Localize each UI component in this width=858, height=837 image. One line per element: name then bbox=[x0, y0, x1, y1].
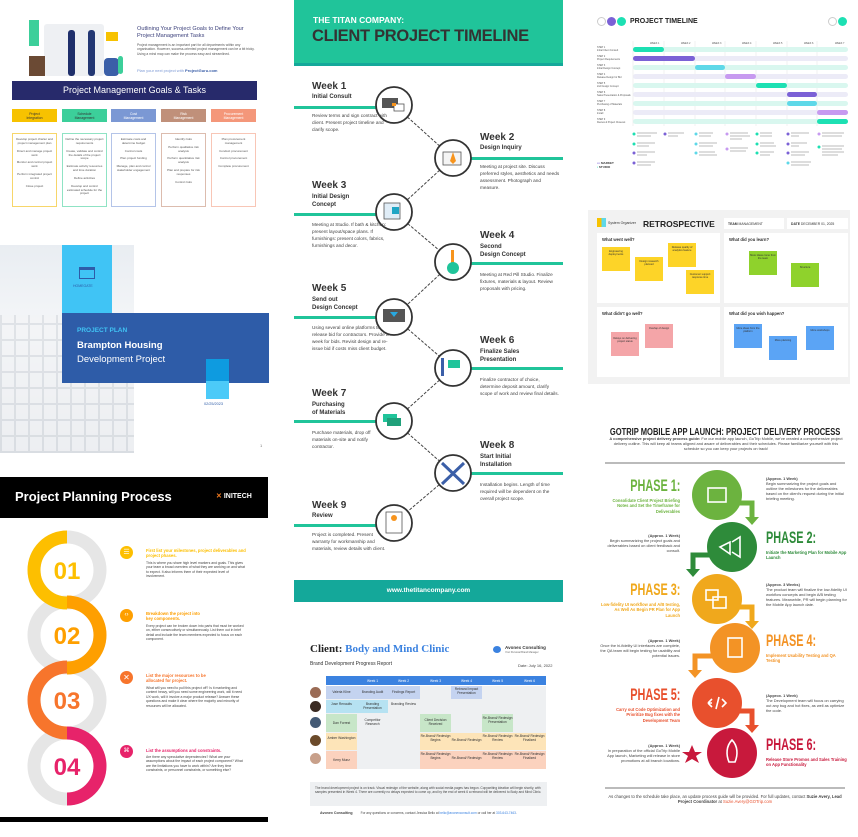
chart: gantt: Project Requirements bbox=[597, 58, 621, 61]
step 4: List the assumptions and constraints. bbox=[146, 748, 221, 753]
footer bbox=[294, 580, 563, 602]
step 1: This is where you share high level markers and goals. This gives your team a broad overview of what they are working on and what to expect. It also informs them of their expected level of involvement. bbox=[146, 561, 245, 578]
week 3: Meeting at Studio. If bath & kitchen: present layout/space plans. If furnishings: present colors, fabrics, furnishings and decor. bbox=[312, 222, 386, 248]
chart: gantt: STEP 8 bbox=[597, 109, 606, 112]
panel: gotrip delivery process: (Approx. 3 Weeks) bbox=[766, 582, 800, 587]
chart: gantt: STEP 6 bbox=[597, 91, 606, 94]
panel: gotrip delivery process: (Approx. 1 Week) bbox=[648, 638, 680, 643]
week 7 bbox=[312, 388, 371, 449]
chart: gantt: WEEK 2 bbox=[681, 42, 691, 45]
panel: gotrip delivery process: Begin summarizing the project goals and deliverables based on client feedback and consult. bbox=[608, 538, 680, 553]
table: Re-Brand/ Redesign Review bbox=[483, 752, 512, 760]
text: link: Plan your next project with ProjectGuru.com bbox=[137, 68, 217, 73]
table bbox=[326, 676, 546, 769]
logo: initech: ✕ INITECH bbox=[216, 493, 252, 500]
panel: client progress report bbox=[310, 643, 552, 815]
columns: Control procurement bbox=[220, 156, 247, 160]
logo: avonex bbox=[493, 645, 546, 654]
table: Dan Forrest bbox=[333, 721, 350, 725]
columns: Risk bbox=[180, 112, 187, 116]
chart: numbered rings bbox=[28, 530, 106, 806]
title box: Development Project bbox=[77, 354, 165, 365]
panel: project management goals bbox=[12, 20, 257, 207]
quadrant: wish bbox=[724, 307, 848, 377]
week 6: Presentation bbox=[480, 357, 516, 363]
phase 3: Low-fidelity UI workflow and A/B testing, As Well As Begin PR Plan for App Launch bbox=[601, 602, 680, 618]
week 5 bbox=[312, 283, 389, 351]
chart: gantt: Sales Presentation & Proposals bbox=[597, 94, 631, 97]
quadrant: wish: What did you wish happen? bbox=[729, 311, 784, 316]
chart: numbered rings: 04 bbox=[54, 754, 81, 781]
footer: www.thetitancompany.com bbox=[387, 587, 470, 594]
chart: gantt: STEP 1 bbox=[597, 46, 606, 49]
header: Project Planning Process bbox=[15, 489, 172, 504]
table: Re-Brand/ Redesign Finalized bbox=[515, 734, 544, 742]
quadrant: didn't go well: Overlap of design bbox=[649, 327, 669, 330]
columns: Project bbox=[29, 112, 40, 116]
columns: Direct and manage project work bbox=[17, 149, 52, 157]
week 7: Purchase materials, drop off materials on-site and notify contractor. bbox=[312, 430, 371, 449]
header bbox=[294, 0, 563, 66]
legend notes bbox=[632, 132, 844, 166]
quadrant: went well: Engineering deployments bbox=[609, 250, 623, 256]
chart: gantt: Release Design for Bid bbox=[597, 76, 622, 79]
columns: Schedule bbox=[77, 112, 92, 116]
columns: Estimate activity resources and time duration bbox=[67, 164, 102, 172]
week 6: Week 6 bbox=[480, 335, 514, 346]
phase 4: PHASE 4: bbox=[766, 631, 816, 650]
phase 1 bbox=[612, 476, 680, 514]
chart: icon circles and connectors bbox=[375, 86, 472, 542]
banner: Project Management Goals & Tasks bbox=[63, 85, 206, 95]
columns: Monitor and control project work bbox=[17, 160, 52, 168]
week 3 bbox=[312, 180, 386, 248]
logo: avonex: Your Personal Brand Manager bbox=[505, 651, 539, 654]
banner bbox=[12, 81, 257, 100]
logo: market studio bbox=[597, 161, 614, 169]
team box: TEAM MANAGEMENT bbox=[728, 222, 763, 226]
step 2: key components. bbox=[146, 616, 180, 621]
table: Amber Washington bbox=[328, 736, 355, 740]
step 4 bbox=[120, 745, 243, 772]
table: Re-Brand/ Redesign Begins bbox=[421, 752, 450, 760]
table: Re-Brand/ Redesign Review bbox=[483, 734, 512, 742]
title box: Brampton Housing bbox=[77, 340, 162, 351]
columns: Perform quantitative risk analysis bbox=[167, 156, 200, 164]
columns: Management bbox=[124, 116, 143, 120]
panel: gotrip delivery process: In preparation of the official GoTrip Mobile App launch, Marketing will release in store promotions at all branch locations. bbox=[607, 748, 680, 763]
week 8: Installation begins. Length of time required will be dependent on the overall project scope. bbox=[480, 482, 550, 501]
title box: PROJECT PLAN bbox=[77, 327, 127, 334]
phase 1: Consolidate Client Project Briefing Notes and Set the Timeframe for Deliverables bbox=[612, 498, 680, 514]
phase 1: PHASE 1: bbox=[630, 476, 680, 495]
step 3: allocated for project. bbox=[146, 678, 187, 683]
columns: Plan procurement management bbox=[222, 137, 245, 145]
week 5: Using several online platforms to release bid for contractors. Provide a week for bids. Revisit design and re-issue bid if costs miss client budget. bbox=[312, 325, 389, 351]
quadrant: went well: Design research planned bbox=[640, 260, 658, 266]
week 8: Installation bbox=[480, 462, 512, 468]
chart: gantt bbox=[597, 41, 848, 126]
chart: phase circles and arrows bbox=[682, 470, 760, 778]
chart: gantt: STEP 3 bbox=[597, 64, 606, 67]
chart: gantt: STEP 7 bbox=[597, 100, 606, 103]
columns: Procurement bbox=[224, 112, 243, 116]
table: Jose Renaults bbox=[331, 702, 352, 706]
week 8: Start Initial bbox=[480, 454, 511, 460]
table: Re-Brand/ Redesign bbox=[452, 756, 481, 760]
week 4: Design Concept bbox=[480, 252, 526, 258]
week 4: Meeting at Red Pill Studio. Finalize fixtures, materials & layout. Review proposals with pricing. bbox=[480, 272, 553, 291]
week 8: Week 8 bbox=[480, 440, 514, 451]
table: Rebrand Impact Presentation bbox=[455, 687, 478, 695]
columns: Perform integrated project control bbox=[17, 172, 52, 180]
intro: A comprehensive project delivery process guide: For our mobile app launch, GoTrip Mobile, we've created a comprehensive project delivery outline. This will keep all teams aligned and aware of deliverables and their schedules. Please familiarize yourself with this schedule so you can keep your projects on track! bbox=[609, 436, 843, 451]
table: Re-Brand/ Redesign Begins bbox=[421, 734, 450, 742]
quadrant: went well: Release quality of analytics feature bbox=[672, 246, 692, 252]
table: Re-Brand/ Redesign Finalized bbox=[515, 752, 544, 760]
chart: gantt: STEP 4 bbox=[597, 73, 606, 76]
phase 3: PHASE 3: bbox=[630, 580, 680, 599]
panel: gotrip delivery process: (Approx. 1 Week) bbox=[648, 533, 680, 538]
footer: Avonex Consulting For any questions or concerns, contact Jessica Bello at bello@avonexconsult.com or call her at 303-643-7463. bbox=[320, 811, 517, 815]
week 9: Review bbox=[312, 513, 333, 519]
panel: project planning process bbox=[0, 477, 268, 822]
panel: gotrip delivery process: Once the hi-fidelity UI interfaces are complete, the QA team will begin testing for usability and potential issues. bbox=[600, 643, 680, 658]
week 2: Meeting at project site. Discuss preferred styles, aesthetics and needs assessment. Photograph and measure. bbox=[480, 164, 559, 190]
week 3: Initial Design bbox=[312, 194, 349, 200]
week 1: Initial Consult bbox=[312, 94, 352, 100]
chart: gantt: STEP 5 bbox=[597, 82, 606, 85]
week 9: Project is completed. Present warranty for workmanship and materials, review details with client. bbox=[312, 532, 385, 551]
table: Branding Review bbox=[391, 702, 416, 706]
table: Branding Presentation bbox=[363, 702, 382, 710]
week 2: Week 2 bbox=[480, 132, 514, 143]
step 3: List the major resources to be bbox=[146, 673, 206, 678]
panel: gotrip delivery process bbox=[600, 426, 847, 804]
footer note: As changes to the schedule take place, an update process guide will be provided. For full updates, contact Suzie Avery, Lead Project Coordinator at Suzie.Avery@GOTrip.com bbox=[608, 794, 842, 804]
date: 02/25/2023 bbox=[204, 402, 223, 406]
chart: gantt: 2nd Design Concept bbox=[597, 85, 619, 88]
week 1: Review terms and sign contract with client. Present project timeline and clarify scope. bbox=[312, 113, 387, 132]
logo: avonex: Avonex Consulting bbox=[505, 645, 546, 650]
week 2: Design Inquiry bbox=[480, 145, 522, 151]
chart: numbered rings: 03 bbox=[54, 688, 80, 715]
quadrant: didn't go well: What didn't go well? bbox=[602, 311, 643, 316]
columns: Create, validate and control the details of the project scope bbox=[66, 149, 103, 160]
step 3: What will you need to pull this project off? Is it marketing and content heavy, will you need some engineering work, will it need UX work, will it involve a major product release? Answer these questions and make it clear where the majority and minority of resources will be allocated. bbox=[146, 686, 242, 708]
columns: Control costs bbox=[125, 149, 142, 153]
week 8 bbox=[480, 440, 550, 501]
chart: gantt: WEEK 1 bbox=[650, 42, 660, 45]
header: THE TITAN COMPANY: bbox=[313, 15, 404, 25]
step 2 bbox=[120, 609, 244, 641]
panel: project timeline gantt bbox=[597, 17, 848, 169]
week 3: Concept bbox=[312, 202, 336, 208]
columns: Estimate costs and determine budget bbox=[121, 137, 146, 145]
chart: numbered rings: 02 bbox=[54, 623, 80, 650]
step 3: ✕ bbox=[123, 673, 130, 682]
quadrant: wish: More ideas from the platform bbox=[736, 327, 760, 333]
step 1 bbox=[120, 546, 246, 578]
text: intro: Project management is an important part for all departments within any organisation. However, success-oriented project management can be a bit tricky. Using a mind map can make the process easy and streamlined. bbox=[137, 43, 255, 56]
panel: retrospective: System Organizer bbox=[608, 221, 636, 225]
background building image bbox=[0, 245, 134, 453]
phase 6: Release Store Promos and Sales Training on App Functionality bbox=[766, 757, 847, 767]
columns: Develop project charter and project management plan bbox=[16, 137, 53, 145]
week 5: Send out bbox=[312, 297, 338, 303]
chart: gantt: WEEK 5 bbox=[773, 42, 783, 45]
quadrant: went well bbox=[597, 233, 720, 303]
columns: Integration bbox=[26, 116, 43, 120]
table: Branding Audit bbox=[362, 690, 383, 694]
table: Week 2 bbox=[398, 678, 409, 682]
week 2 bbox=[480, 132, 559, 190]
week 6: Finalize contractor of choice, determine deposit amount, clarify scope of work and review final details. bbox=[480, 377, 559, 396]
panel: gotrip delivery process: The product team will finalize the low-fidelity UI workflow concepts and begin A/B testing features. Meanwhile, PR will begin planning for the Mobile App launch date. bbox=[766, 587, 847, 607]
title: RETROSPECTIVE bbox=[643, 219, 715, 229]
chart: gantt: Purchasing of Materials bbox=[597, 103, 623, 106]
phase 6: PHASE 6: bbox=[766, 735, 816, 754]
step 4: Are there any speculative dependencies? What are your assumptions about the impact of each project component? What are the limitations you have to work within? Are they time constraints, or personnel constraints, or something else? bbox=[146, 755, 243, 772]
header bbox=[0, 477, 268, 518]
step 2: ‹› bbox=[124, 612, 128, 618]
step 2: Every project can be broken down into parts that must be worked on, either consecutively or simultaneously. List them out in brief detail and include the team members expected to focus on each component. bbox=[146, 624, 244, 641]
heading: outlining goals: Outlining Your Project Goals to Define Your Project Management Tasks bbox=[137, 26, 244, 39]
columns: Close project bbox=[26, 184, 43, 188]
table: Competitor Research bbox=[364, 718, 381, 726]
chart: gantt: WEEK 6 bbox=[804, 42, 814, 45]
phase 5 bbox=[600, 687, 680, 723]
columns: Develop and control estimated schedule for the project bbox=[67, 184, 102, 195]
subtitle: Brand Development Progress Report bbox=[310, 661, 392, 667]
date: Date: July 16, 2022 bbox=[518, 663, 552, 668]
date box bbox=[787, 218, 848, 229]
week 1: Week 1 bbox=[312, 81, 346, 92]
week 9: Week 9 bbox=[312, 500, 346, 511]
table: Valeria Kline bbox=[332, 690, 351, 694]
panel: gotrip delivery process: (Approx. 1 Week) bbox=[766, 476, 798, 481]
table: Week 3 bbox=[430, 678, 441, 682]
note box bbox=[310, 782, 547, 806]
quadrant: didn't go well: Delays on delivering project status bbox=[613, 337, 637, 343]
step 4: ⌘ bbox=[124, 748, 130, 754]
panel: gotrip delivery process: The Development team will focus on carrying out any bug and hot fixes, as well as optimize the code. bbox=[766, 698, 844, 713]
panel: project plan cover bbox=[0, 245, 269, 453]
panel: gotrip delivery process: (Approx. 1 Week) bbox=[766, 693, 798, 698]
columns: Conduct procurement bbox=[219, 149, 248, 153]
table: Kerry Munz bbox=[333, 758, 350, 762]
week 6: Finalize Sales bbox=[480, 349, 519, 355]
quadrant: learn: More ideas come from the team bbox=[750, 254, 776, 260]
phase 2: PHASE 2: bbox=[766, 528, 816, 547]
chart: gantt: WEEK 4 bbox=[742, 42, 752, 45]
accent square bbox=[206, 359, 229, 399]
quadrant: learn bbox=[724, 233, 848, 303]
chart: gantt: WEEK 3 bbox=[712, 42, 722, 45]
chart: gantt: STEP 9 bbox=[597, 118, 606, 121]
panel: gotrip delivery process: Begin summarizing the project goals and outline the milestones for the deliverables based on the client's request during the initial briefing meeting. bbox=[766, 481, 844, 501]
icon: homegate bbox=[79, 267, 95, 279]
step 2: Breakdown the project into bbox=[146, 611, 200, 616]
date box: DATE DECEMBER 01, 2025 bbox=[791, 222, 834, 226]
quadrant: wish: More workshops bbox=[810, 329, 830, 332]
title: GOTRIP MOBILE APP LAUNCH: PROJECT DELIVERY PROCESS bbox=[610, 426, 840, 438]
logo: market studio: ▪ STUDIO bbox=[597, 165, 610, 169]
avatars bbox=[310, 687, 321, 764]
step 1: ☰ bbox=[123, 549, 130, 556]
chart: gantt: Review & Project Closeout bbox=[597, 121, 626, 124]
chart: gantt: Initial Design Concept bbox=[597, 67, 621, 70]
columns bbox=[12, 109, 256, 207]
week 6 bbox=[480, 335, 559, 396]
title: PROJECT TIMELINE bbox=[630, 18, 698, 25]
panel: retrospective bbox=[588, 210, 850, 384]
phase 2 bbox=[766, 528, 846, 560]
chart: gantt: STEP 2 bbox=[597, 55, 606, 58]
quadrant: went well: Customer support response time bbox=[690, 273, 710, 279]
columns: Identify risks bbox=[175, 137, 192, 141]
phase 4 bbox=[766, 633, 848, 664]
logo block bbox=[62, 245, 112, 313]
columns: Manage, plan and control stakeholder engagement bbox=[117, 164, 150, 172]
table: Week 4 bbox=[461, 678, 472, 682]
table: Client Decision Received bbox=[424, 718, 446, 726]
chart: gantt: WEEK 7 bbox=[835, 42, 845, 45]
week 7: Week 7 bbox=[312, 388, 346, 399]
week 5: Week 5 bbox=[312, 283, 346, 294]
title box bbox=[62, 313, 269, 383]
table: Findings Report bbox=[392, 690, 415, 694]
columns: Define the necessary project requirements bbox=[65, 137, 104, 145]
step 3 bbox=[120, 671, 242, 708]
page number: 1 bbox=[260, 443, 262, 448]
chart: gantt: Install bbox=[597, 112, 604, 115]
week 5: Design Concept bbox=[312, 305, 358, 311]
panel: titan client project timeline bbox=[294, 0, 563, 602]
phase 3 bbox=[601, 580, 680, 618]
table: Week 6 bbox=[524, 678, 535, 682]
chart: gantt: Initial Client Consult bbox=[597, 49, 618, 52]
columns: Cost bbox=[130, 112, 137, 116]
quadrant: went well: What went well? bbox=[602, 237, 635, 242]
week 7: Purchasing bbox=[312, 402, 345, 408]
columns: Perform qualitative risk analysis bbox=[168, 145, 199, 153]
note box: The brand development project is on track. Visual redesign of the website, along with social media pages has begun. Copywriting ideation will begin shortly, with samples presented in Week 4. There are currently no delays expected to come up, and by the end of week 6 a rebrand will be delivered to Body and Mind Clinic. bbox=[315, 786, 541, 794]
week 4 bbox=[480, 230, 553, 291]
table: Week 1 bbox=[367, 678, 378, 682]
quadrant: learn: Structure bbox=[800, 266, 810, 269]
illustration: team bbox=[29, 20, 123, 76]
columns: Control risks bbox=[175, 180, 192, 184]
quadrant: learn: What did you learn? bbox=[729, 237, 769, 242]
week 7: of Materials bbox=[312, 410, 345, 416]
columns: Management bbox=[224, 116, 243, 120]
week 4: Week 4 bbox=[480, 230, 514, 241]
week 1 bbox=[312, 81, 387, 132]
header: CLIENT PROJECT TIMELINE bbox=[312, 27, 529, 45]
logo block: HOMEGATE bbox=[73, 284, 93, 288]
table: Re-Brand/ Redesign Presentation bbox=[483, 716, 512, 724]
columns: Management bbox=[75, 116, 94, 120]
phase 5: PHASE 5: bbox=[630, 685, 680, 704]
columns: Plan and prepare for risk responses bbox=[167, 168, 200, 176]
table: Week 5 bbox=[492, 678, 503, 682]
logo: market studio: ▪▪▪ MARKET bbox=[597, 161, 614, 165]
week 9 bbox=[312, 500, 385, 551]
step 1: First list your milestones, project deliverables and project phases. bbox=[146, 548, 246, 558]
title: Client: Body and Mind Clinic bbox=[310, 643, 449, 655]
team box bbox=[724, 218, 784, 229]
week 4: Second bbox=[480, 244, 502, 250]
columns: Define activities bbox=[74, 176, 95, 180]
phase 4: Implement Usability Testing and QA Testing bbox=[766, 653, 836, 663]
columns: Plan project funding bbox=[120, 156, 147, 160]
phase 5: Carry out Code Optimization and Prioritize Bug fixes with the Development Team bbox=[616, 707, 680, 723]
columns: Management bbox=[174, 116, 193, 120]
table: Re-Brand/ Redesign bbox=[452, 738, 481, 742]
phase 6 bbox=[766, 737, 848, 768]
panel: gotrip delivery process: (Approx. 1 Week) bbox=[648, 743, 680, 748]
week 3: Week 3 bbox=[312, 180, 346, 191]
chart: numbered rings: 01 bbox=[54, 558, 80, 585]
quadrant: didn't go well bbox=[597, 307, 720, 377]
columns: Complete procurement bbox=[218, 164, 249, 168]
phase 2: Initiate the Marketing Plan for Mobile App Launch bbox=[766, 550, 846, 560]
quadrant: wish: More planning bbox=[775, 339, 791, 342]
